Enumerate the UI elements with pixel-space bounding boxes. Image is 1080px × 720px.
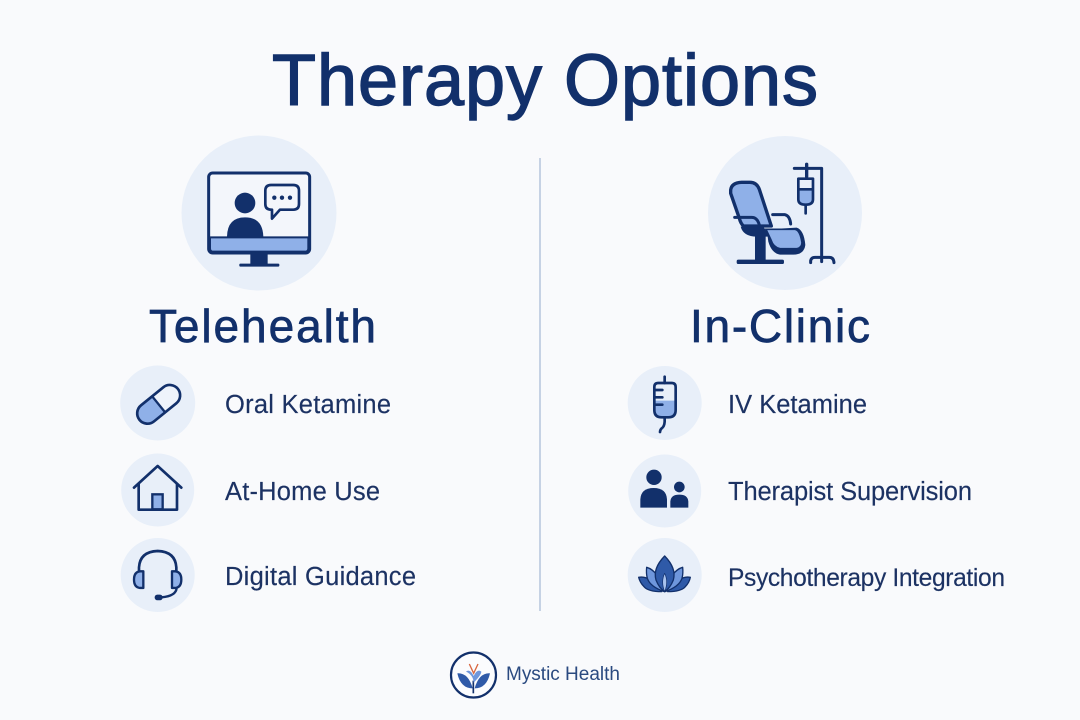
logo: mystic health	[451, 652, 620, 698]
item: digital guidance: Digital Guidance	[225, 563, 416, 591]
icon: video call monitor	[182, 136, 336, 290]
item: oral ketamine	[120, 366, 391, 440]
item: digital guidance	[121, 538, 416, 612]
heading: telehealth: Telehealth	[149, 300, 376, 352]
item: at-home use: At-Home Use	[225, 478, 380, 506]
item: therapist supervision: Therapist Supervision	[728, 478, 972, 506]
item: iv ketamine: IV Ketamine	[728, 391, 867, 419]
heading: in-clinic: In-Clinic	[690, 300, 870, 352]
item: psychotherapy integration: Psychotherapy Integration	[728, 565, 1005, 592]
item: therapist supervision	[628, 454, 972, 528]
icon: infusion chair and iv stand	[708, 136, 862, 290]
item: at-home use	[121, 454, 380, 526]
item: psychotherapy integration	[628, 538, 1005, 612]
panel: telehealth	[120, 136, 416, 612]
item: iv ketamine	[628, 366, 867, 440]
title: Therapy Options	[272, 41, 818, 121]
panel: in-clinic	[628, 136, 1005, 612]
item: oral ketamine: Oral Ketamine	[225, 391, 391, 419]
logo: mystic health: Mystic Health	[506, 664, 620, 685]
